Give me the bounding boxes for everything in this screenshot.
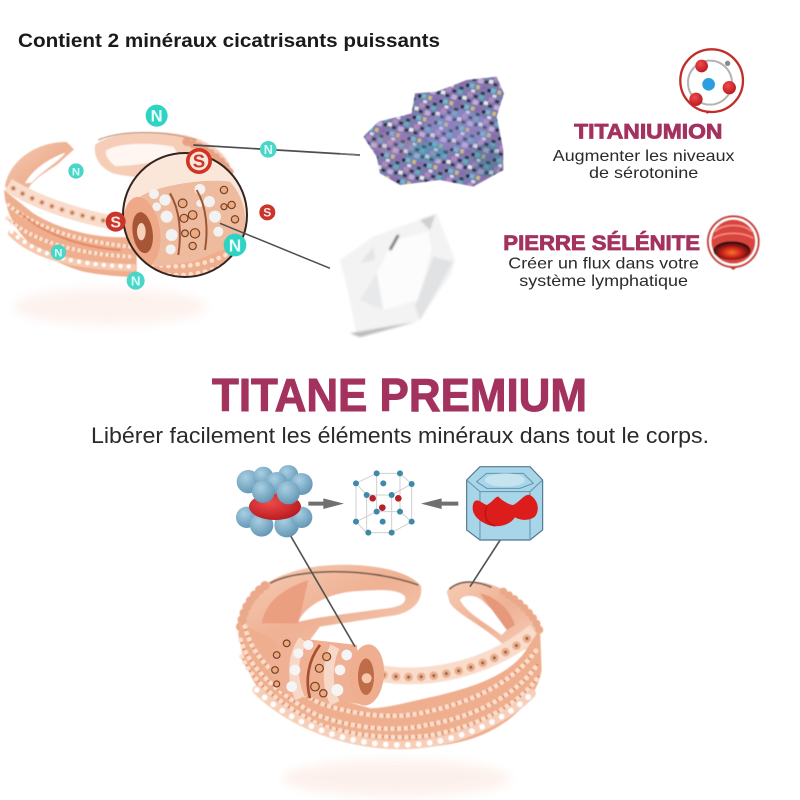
lower rope body (238, 623, 542, 748)
badge S: S (110, 214, 121, 231)
ring bands (4, 132, 232, 277)
badge N (260, 141, 277, 158)
spinner barrel (270, 637, 387, 707)
icon: atom (680, 49, 743, 114)
rope strands (241, 627, 538, 737)
main heading: TITANE PREMIUM (212, 369, 587, 421)
badge N (146, 105, 168, 127)
badge S (106, 212, 126, 232)
arrow right (308, 498, 344, 509)
badge S: S (193, 151, 205, 172)
arrow left (421, 498, 458, 509)
lower diagram and ring (236, 465, 543, 797)
reflection (13, 288, 207, 325)
red core (249, 493, 301, 520)
reflection (283, 760, 510, 797)
badge S (259, 204, 275, 220)
spinner barrel (140, 181, 245, 267)
description: Augmenter les niveaux (553, 148, 735, 165)
badge N (68, 163, 84, 179)
spinner end (124, 196, 160, 264)
back band right (447, 581, 541, 650)
right column: minerals and labels (340, 49, 759, 337)
lower rope inside lens (150, 249, 230, 276)
icon: crystal lattice (353, 470, 415, 536)
zircon rows (149, 184, 223, 254)
badge N (127, 272, 145, 290)
badge N: N (229, 235, 241, 255)
magnified spinner lens (119, 153, 253, 280)
bead band (8, 185, 115, 223)
left open end (5, 142, 74, 197)
heading: PIERRE SÉLÉNITE (503, 230, 700, 255)
pointer line right (470, 530, 507, 587)
pointer line left (283, 523, 355, 647)
badge N: N (54, 248, 62, 260)
label: titanium (553, 119, 735, 182)
badge N: N (151, 107, 163, 126)
N and S badges (51, 105, 277, 290)
lens outline (123, 153, 247, 277)
ring (238, 565, 542, 748)
badge N (224, 234, 246, 256)
upper spheres (237, 465, 313, 504)
badge N: N (264, 143, 273, 157)
rope body (4, 190, 137, 277)
heading: TITANIUMION (574, 119, 722, 143)
icon: atom cluster (236, 465, 313, 537)
spinner end (347, 643, 387, 707)
mineral: selenite crystal (340, 213, 455, 337)
description: Créer un flux dans votre (508, 255, 699, 272)
back band (95, 132, 232, 180)
badge N: N (131, 274, 140, 289)
zircon row (257, 690, 532, 745)
lower spheres (236, 507, 312, 537)
pointer lines (193, 145, 360, 268)
description line 2: système lymphatique (519, 273, 688, 290)
subtitle: Libérer facilement les éléments minéraux dans tout le corps. (91, 423, 709, 448)
upper bead band (380, 632, 535, 676)
mineral: titanium ore (363, 77, 504, 187)
badge S: S (263, 206, 271, 220)
badge N: N (72, 166, 80, 178)
back band left (238, 565, 421, 657)
title: healing minerals: Contient 2 minéraux cicatrisants puissants (18, 31, 440, 52)
label: selenite (503, 230, 700, 290)
gold bead rows (178, 186, 239, 250)
icon: hexagonal cell (467, 467, 543, 540)
badge S (186, 148, 212, 174)
description line 2: de sérotonine (589, 165, 699, 182)
badge N (51, 245, 66, 260)
top ring with magnetic badges (4, 105, 360, 325)
gold beads (272, 640, 331, 697)
zircon stones (286, 640, 352, 696)
icon: selenite sphere (708, 216, 759, 270)
pointer end (340, 154, 360, 155)
